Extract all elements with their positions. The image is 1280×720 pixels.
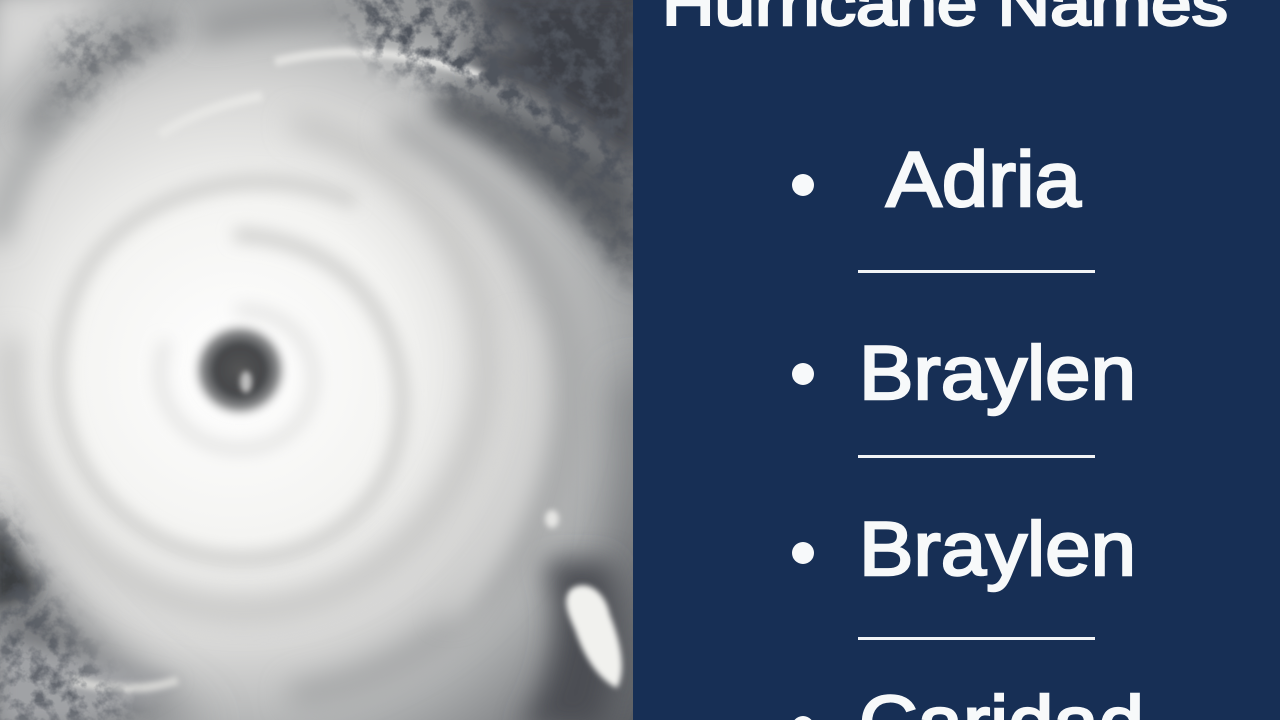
list item: Braylen: Braylen — [859, 331, 1136, 416]
list item: Braylen (repeat): Braylen — [859, 507, 1136, 592]
bright cumulus cluster — [545, 510, 622, 688]
panel: satellite image of hurricane — [0, 0, 633, 720]
spiral cloud bands — [11, 125, 572, 695]
hurricane eye — [190, 320, 290, 420]
list item: Adria: Adria — [886, 135, 1082, 223]
storm cloud mass — [0, 0, 633, 720]
cloud texture — [0, 0, 633, 720]
panel: names list — [633, 0, 1280, 720]
list item: Adria — [792, 135, 1082, 223]
